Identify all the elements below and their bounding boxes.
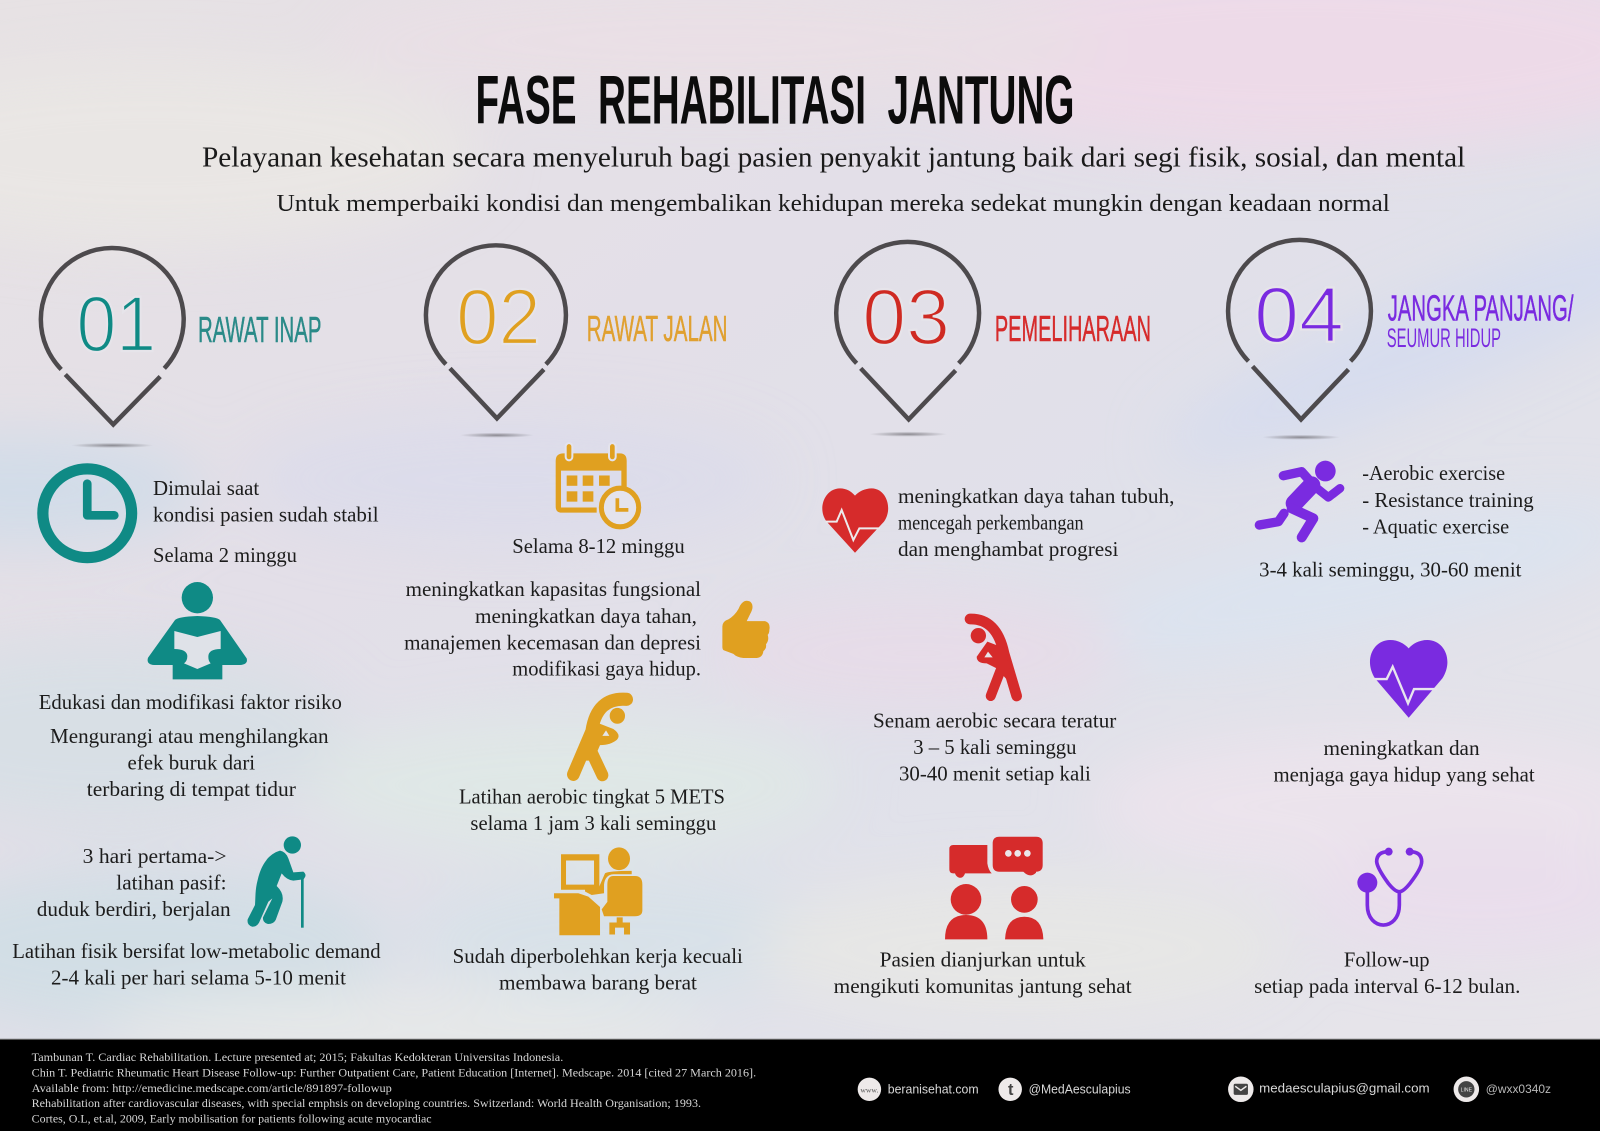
- text: physical exercise: 2-4 kali per hari selama 5-10 menit: [51, 966, 346, 990]
- text: benefits: meningkatkan daya tahan tubuh,: [898, 484, 1174, 508]
- text: exercise types: - Aquatic exercise: [1362, 515, 1509, 539]
- text: senam aerobic: 3 – 5 kali seminggu: [913, 735, 1077, 759]
- pin shadow: [1262, 435, 1340, 440]
- text: healthy lifestyle: meningkatkan dan: [1323, 736, 1480, 760]
- text: follow-up: [1254, 947, 1520, 998]
- icon: runner: [1259, 461, 1340, 537]
- pin marker 03: [836, 242, 979, 419]
- icon: thumbs up: [722, 601, 770, 658]
- number 01: 01: [77, 280, 156, 368]
- text: community: mengikuti komunitas jantung sehat: [834, 974, 1132, 998]
- panel: phase 02 rawat jalan: [404, 245, 770, 994]
- panel: phase 03 pemeliharaan: [822, 242, 1174, 998]
- icon: heart with pulse: [1370, 640, 1447, 718]
- contact: line: LINE: [1461, 1087, 1473, 1093]
- text: benefits: dan menghambat progresi: [898, 537, 1119, 561]
- text: reduce bed rest effects: [50, 724, 329, 801]
- text: reduce bed rest effects: terbaring di tempat tidur: [87, 777, 296, 801]
- text: exercise types: - Resistance training: [1362, 488, 1534, 512]
- panel: footer: [0, 1039, 1600, 1131]
- text: reduce bed rest effects: efek buruk dari: [128, 750, 255, 774]
- text: goals: [404, 577, 701, 681]
- text: senam aerobic: Senam aerobic secara teratur: [873, 709, 1116, 733]
- title: FASE REHABILITASI JANTUNG: [476, 62, 1074, 138]
- icon: clock: [43, 469, 132, 558]
- text: first three days: [37, 844, 231, 921]
- text: benefits: [898, 484, 1174, 561]
- label rawat inap: RAWAT INAP: [198, 310, 321, 350]
- text: goals: meningkatkan kapasitas fungsional: [406, 577, 701, 601]
- references: Chin T. Pediatric Rheumatic Heart Disease Follow-up: Further Outpatient Care, Patient Education [Internet]. Medscape. 2014 [cited 27 March 2016].: [32, 1066, 756, 1080]
- number 03: 03: [862, 273, 950, 361]
- label rawat jalan: RAWAT JALAN: [587, 309, 728, 349]
- text: start condition: Selama 2 minggu: [153, 543, 297, 567]
- text: senam aerobic: 30-40 menit setiap kali: [899, 762, 1091, 786]
- icon: stethoscope: [1357, 848, 1422, 925]
- text: follow-up: Follow-up: [1344, 947, 1430, 971]
- contact: email: [1228, 1077, 1430, 1102]
- label pemeliharaan: PEMELIHARAAN: [995, 309, 1151, 349]
- text: first three days: 3 hari pertama->: [83, 844, 227, 868]
- pin marker 02: [426, 245, 566, 418]
- text: community: Pasien dianjurkan untuk: [880, 947, 1086, 971]
- panel: phase 01 rawat inap: [12, 248, 381, 990]
- text: education: Edukasi dan modifikasi faktor risiko: [39, 690, 342, 714]
- text: start condition: [153, 476, 379, 567]
- pin marker 01: [41, 248, 184, 425]
- text: physical exercise: [12, 939, 381, 990]
- text: return to work: [453, 944, 743, 994]
- text: benefits: mencegah perkembangan: [898, 511, 1084, 535]
- text: frequency: 3-4 kali seminggu, 30-60 menit: [1259, 558, 1522, 582]
- contact: website: [858, 1078, 979, 1101]
- text: aerobic training: [459, 785, 725, 835]
- icon: elderly person with cane: [248, 836, 306, 928]
- text: reduce bed rest effects: Mengurangi atau menghilangkan: [50, 724, 329, 748]
- text: exercise types: -Aerobic exercise: [1362, 461, 1505, 485]
- contact: line: @wxx0340z: [1486, 1083, 1551, 1096]
- contact: email: medaesculapius@gmail.com: [1259, 1080, 1430, 1095]
- icon: stretching figure: [573, 699, 627, 775]
- icon: stretching figure: [970, 619, 1017, 696]
- text: return to work: Sudah diperbolehkan kerja kecuali: [453, 944, 743, 968]
- text: duration: Selama 8-12 minggu: [512, 534, 685, 558]
- text: start condition: kondisi pasien sudah stabil: [153, 502, 379, 526]
- text: healthy lifestyle: menjaga gaya hidup yang sehat: [1273, 763, 1535, 787]
- contact: twitter: @MedAesculapius: [1029, 1081, 1131, 1096]
- text: physical exercise: Latihan fisik bersifat low-metabolic demand: [12, 939, 381, 963]
- references: Tambunan T. Cardiac Rehabilitation. Lecture presented at; 2015; Fakultas Kedokteran Universitas Indonesia.: [32, 1050, 563, 1064]
- contact: website: www.: [860, 1085, 878, 1094]
- text: exercise types: [1362, 461, 1534, 539]
- panel: phase 04 jangka panjang: [1228, 240, 1574, 998]
- subtitle: Pelayanan kesehatan secara menyeluruh bagi pasien penyakit jantung baik dari segi fisik, sosial, dan mental: [202, 142, 1466, 173]
- references: Rehabilitation after cardiovascular diseases, with special emphsis on developing countries. Switzerland: World Health Organisation; 1993.: [32, 1096, 701, 1110]
- text: aerobic training: selama 1 jam 3 kali seminggu: [470, 811, 717, 835]
- pin shadow: [71, 443, 153, 448]
- goal statement: Untuk memperbaiki kondisi dan mengembalikan kehidupan mereka sedekat mungkin dengan keadaan normal: [277, 190, 1390, 217]
- references: Available from: http://emedicine.medscape.com/article/891897-followup: [32, 1081, 392, 1095]
- text: healthy lifestyle: [1273, 736, 1535, 787]
- pin shadow: [460, 433, 534, 438]
- contact: twitter: [998, 1078, 1131, 1101]
- references: [32, 1050, 756, 1125]
- text: start condition: Dimulai saat: [153, 476, 259, 500]
- label seumur hidup: SEUMUR HIDUP: [1387, 323, 1501, 353]
- text: first three days: duduk berdiri, berjalan: [37, 897, 231, 921]
- icon: community chat: [945, 837, 1043, 939]
- text: senam aerobic: [873, 709, 1116, 786]
- text: goals: manajemen kecemasan dan depresi: [404, 630, 701, 654]
- contact: line: [1454, 1077, 1551, 1102]
- text: goals: modifikasi gaya hidup.: [512, 657, 701, 681]
- number 02: 02: [456, 273, 541, 361]
- text: follow-up: setiap pada interval 6-12 bulan.: [1254, 974, 1520, 998]
- icon: heart with pulse: [822, 488, 888, 553]
- pin marker 04: [1228, 240, 1371, 419]
- text: return to work: membawa barang berat: [499, 970, 697, 994]
- pin shadow: [869, 432, 947, 437]
- text: goals: meningkatkan daya tahan,: [475, 604, 697, 628]
- text: aerobic training: Latihan aerobic tingkat 5 METS: [459, 785, 725, 809]
- contact: twitter: t: [1008, 1081, 1014, 1099]
- icon: person at computer: [554, 847, 642, 935]
- icon: calendar with clock: [556, 443, 639, 527]
- icon: person reading: [148, 582, 247, 679]
- text: first three days: latihan pasif:: [116, 870, 227, 894]
- contact: website: beranisehat.com: [888, 1081, 979, 1096]
- text: community: [834, 947, 1132, 998]
- references: Cortes, O.L, et.al, 2009, Early mobilisation for patients following acute myocardiac: [32, 1111, 432, 1125]
- number 04: 04: [1254, 271, 1344, 359]
